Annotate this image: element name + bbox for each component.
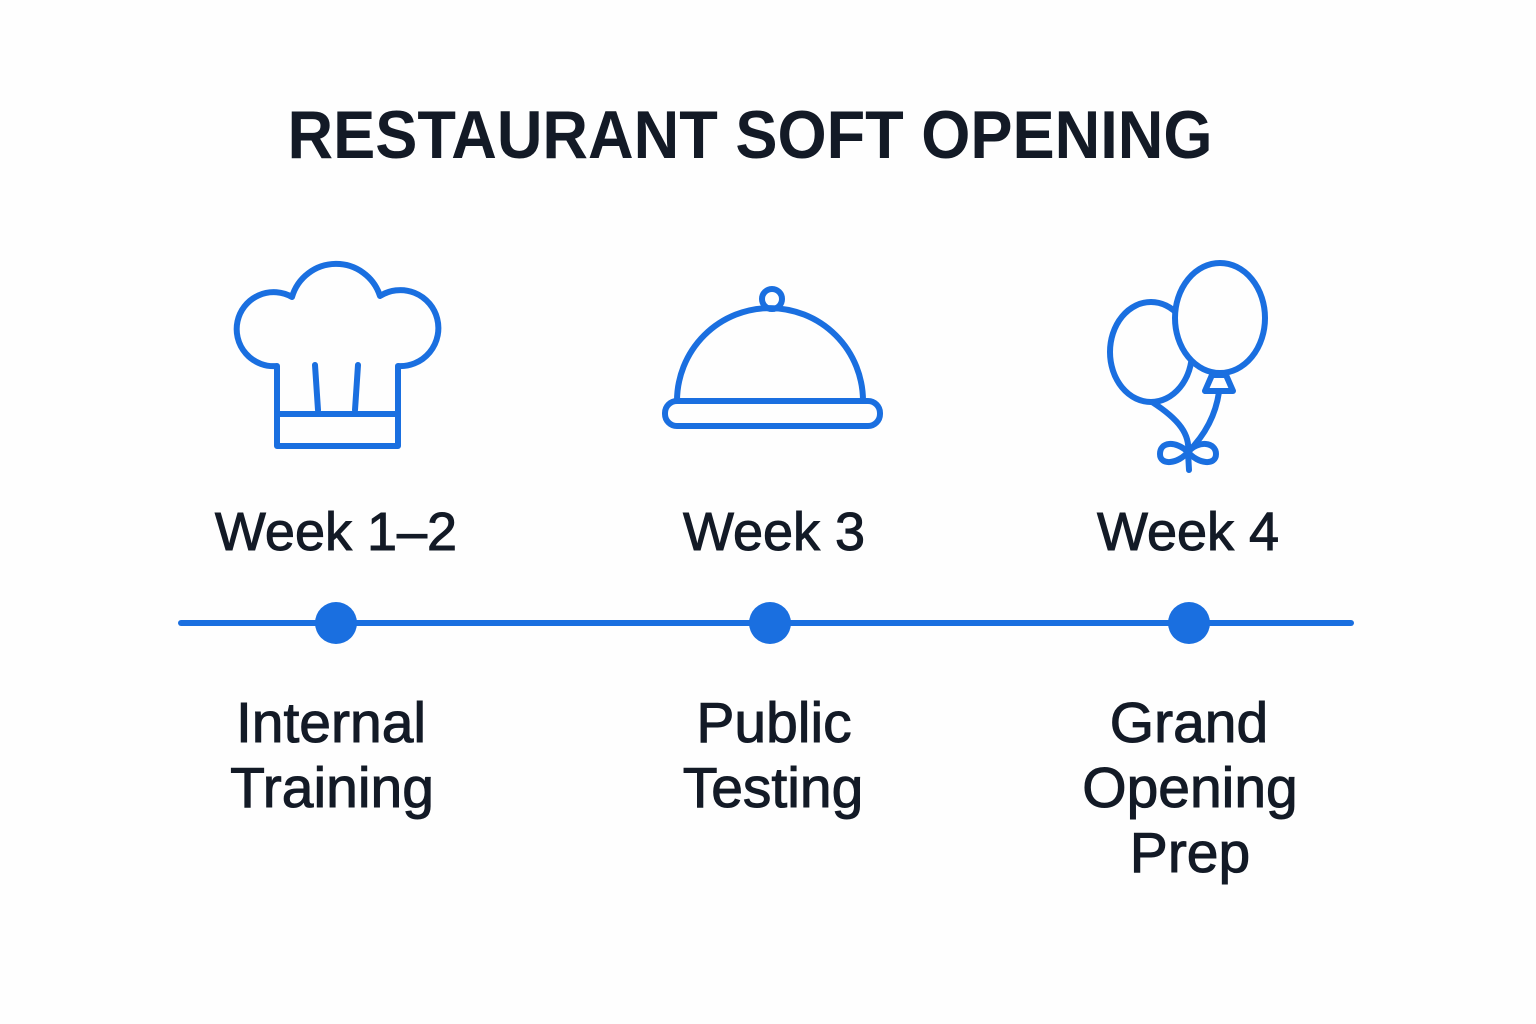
phase labels: Training bbox=[230, 756, 434, 820]
phase labels: Internal bbox=[236, 691, 426, 755]
icon: cloche bbox=[665, 289, 880, 426]
phase labels: Testing bbox=[683, 756, 863, 820]
icon: balloons bbox=[1110, 263, 1265, 470]
week labels: Week 4 bbox=[1097, 502, 1279, 562]
title: RESTAURANT SOFT OPENING bbox=[288, 97, 1212, 173]
week labels: Week 1–2 bbox=[215, 502, 457, 562]
week labels bbox=[215, 502, 1279, 562]
icon: chef hat bbox=[237, 264, 438, 446]
phase labels: Grand bbox=[1110, 691, 1268, 755]
timeline bbox=[181, 602, 1351, 644]
phase labels: Opening bbox=[1082, 756, 1298, 820]
week labels: Week 3 bbox=[683, 502, 865, 562]
phase labels: Public bbox=[696, 691, 852, 755]
phase labels: Prep bbox=[1130, 821, 1250, 885]
phase labels bbox=[230, 691, 1298, 885]
